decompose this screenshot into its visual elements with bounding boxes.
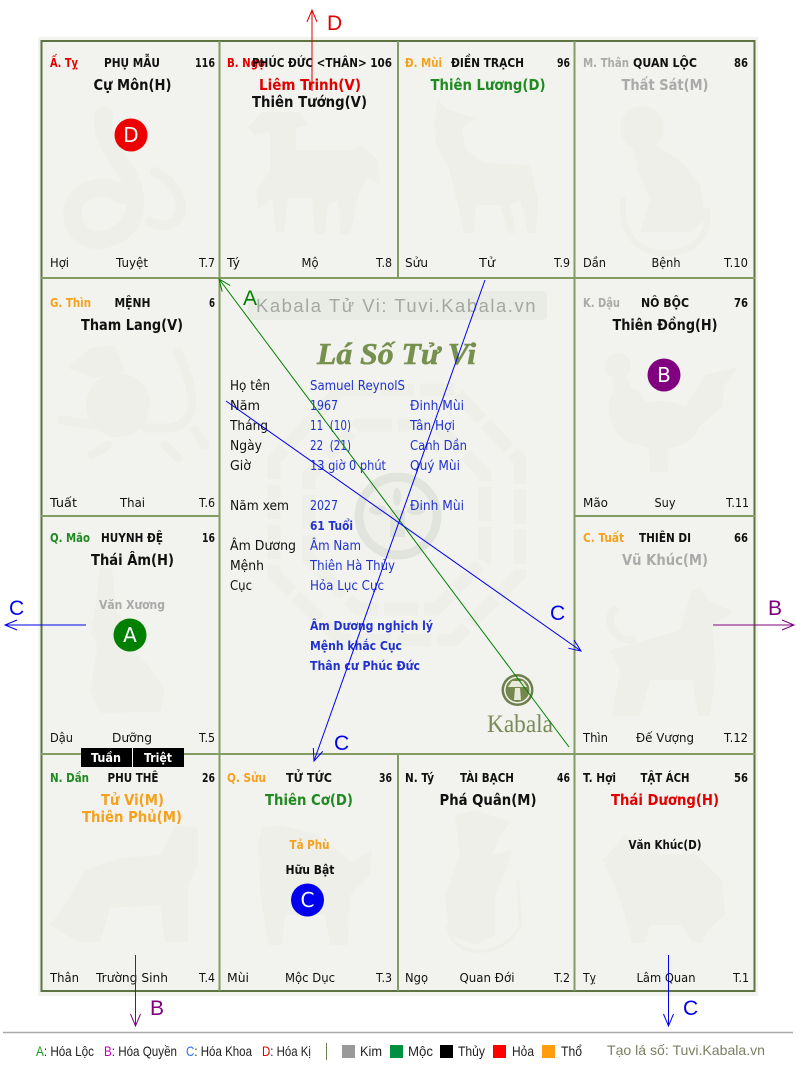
palace: Sửu Tử Tức: Hữu Bật: [286, 862, 335, 877]
arrow: D up: [312, 10, 342, 91]
palace: Mão Huynh Đệ: Q. Mão: [50, 530, 90, 545]
palace: Dậu Nô Bộc: Mão: [583, 495, 608, 510]
palace: Ngọ Phúc Đức: T.8: [375, 255, 392, 270]
palace: Thân Quan Lộc: 86: [734, 55, 748, 70]
arrow: A Hóa Lộc: [219, 279, 569, 747]
badge C: C: [301, 888, 314, 912]
info table: Ngày: [230, 439, 262, 454]
palace: Dần Phu Thê: Tử Vi(M): [101, 791, 164, 809]
badge A: A: [123, 623, 137, 647]
palace: Tý Tài Bạch: TÀI BẠCH: [460, 770, 514, 785]
badge B: B: [657, 363, 671, 387]
palace: Thìn Mệnh: G. Thìn: [50, 295, 91, 310]
palace: Mùi Điền Trạch: 96: [557, 55, 570, 70]
palace: Tý Tài Bạch: 46: [557, 770, 570, 785]
info table: Năm xem: [230, 499, 289, 514]
legend: Hỏa: [512, 1043, 534, 1059]
palace: Mùi Điền Trạch: Sửu: [405, 255, 428, 270]
palace: Ngọ Phúc Đức: Tý: [226, 255, 241, 270]
palace: Dần Phu Thê: 26: [202, 770, 215, 785]
title: Lá Số Tử Vi: [316, 336, 476, 371]
arrow: C to Tuất: [226, 401, 581, 651]
palace: Tuất Thiên Di: 66: [734, 530, 748, 545]
arrow: B down: [136, 955, 164, 1026]
palace: Tuất Thiên Di: T.12: [723, 730, 748, 745]
palace: Hợi Tật Ách: Văn Khúc(D): [628, 837, 702, 852]
palace: Mùi Điền Trạch: Đ. Mùi: [405, 55, 442, 70]
palace: Tý Tài Bạch: T.2: [553, 970, 570, 985]
palace: Dậu Nô Bộc: Thiên Đồng(H): [612, 315, 718, 334]
badge B: [648, 358, 680, 392]
arrow: A Hóa Lộc: A: [243, 287, 257, 310]
legend: Thổ: [561, 1043, 582, 1059]
palace: Mùi Điền Trạch: ĐIỀN TRẠCH: [451, 53, 524, 70]
info table: Canh Dần: [410, 439, 467, 454]
palace: Tỵ Phụ Mẫu: Ấ. Tỵ: [50, 53, 78, 70]
palace: Dần Phu Thê: Trường Sinh: [95, 970, 168, 985]
palace: Dậu Nô Bộc: [583, 295, 749, 510]
palace: Thìn Mệnh: Tham Lang(V): [81, 316, 183, 334]
info table: Cục: [230, 579, 252, 594]
palace: Sửu Tử Tức: TỬ TỨC: [286, 769, 332, 785]
info table: Âm Dương: [230, 538, 296, 554]
palace: Thân Quan Lộc: Bệnh: [652, 255, 680, 270]
badge: Tuần Triệt: Tuần: [91, 750, 121, 765]
info table: Âm Nam: [310, 538, 361, 554]
palace: Tỵ Phụ Mẫu: PHỤ MẪU: [104, 54, 160, 70]
palace: Sửu Tử Tức: Mộc Dục: [285, 970, 335, 985]
palace: Ngọ Phúc Đức: PHÚC ĐỨC <THÂN> 106: [252, 55, 392, 70]
arrow: C to Sửu: [314, 280, 485, 761]
palace: Hợi Tật Ách: 56: [734, 770, 748, 785]
info table: 11 (10): [310, 419, 351, 434]
palace: Tỵ Phụ Mẫu: 116: [195, 55, 215, 70]
palace: Ngọ Phúc Đức: [226, 55, 392, 270]
palace: Thân Quan Lộc: Dần: [583, 255, 606, 270]
site banner: Kabala Tử Vi: Tuvi.Kabala.vn: [256, 296, 537, 316]
info table: Tân Hợi: [409, 419, 455, 434]
palace: Dần Phu Thê: Thiên Phủ(M): [82, 808, 182, 826]
palace: Tỵ Phụ Mẫu: Cự Môn(H): [94, 76, 172, 94]
palace: Thìn Mệnh: Tuất: [49, 495, 77, 510]
site banner: [248, 291, 547, 320]
badge D: D: [123, 123, 139, 147]
badge A: [114, 618, 146, 652]
legend: Kim: [360, 1043, 382, 1059]
legend: [3, 1032, 793, 1060]
legend: Tạo lá số: Tuvi.Kabala.vn: [607, 1042, 765, 1058]
info table: 61 Tuổi: [310, 518, 353, 533]
palace: Thân Quan Lộc: Thất Sát(M): [622, 76, 708, 94]
palace: Tỵ Phụ Mẫu: Hợi: [50, 255, 69, 270]
palace: Thìn Mệnh: MỆNH: [114, 295, 150, 310]
info table: Mệnh khắc Cục: [310, 638, 402, 653]
palace: Mùi Điền Trạch: T.9: [553, 255, 570, 270]
palace: Thìn Mệnh: [49, 295, 215, 510]
palace: Dậu Nô Bộc: Suy: [654, 495, 676, 510]
palace: Dậu Nô Bộc: K. Dậu: [583, 295, 620, 310]
info table: Năm: [230, 399, 260, 414]
palace: Dần Phu Thê: N. Dần: [50, 770, 89, 785]
palace: Hợi Tật Ách: Thái Dương(H): [611, 791, 719, 809]
palace: Dậu Nô Bộc: NÔ BỘC: [641, 295, 689, 310]
palace: Sửu Tử Tức: Thiên Cơ(D): [265, 791, 353, 809]
palace: Mão Huynh Đệ: Văn Xương: [99, 597, 165, 612]
palace: Thân Quan Lộc: [583, 55, 748, 270]
arrow: B right: B: [768, 597, 782, 620]
badge D: [114, 118, 148, 152]
palace: Mão Huynh Đệ: T.5: [198, 730, 215, 745]
info table: Họ tên: [230, 379, 270, 394]
palace: Mão Huynh Đệ: Dưỡng: [112, 730, 152, 745]
palace: Hợi Tật Ách: T. Hợi: [583, 770, 616, 785]
info table: [229, 379, 467, 673]
info table: Mệnh: [230, 559, 264, 574]
palace: Ngọ Phúc Đức: Mộ: [302, 255, 318, 270]
watermark: bagua and tree seal: [274, 390, 520, 640]
arrow: B down: B: [150, 997, 164, 1020]
info table: 13 giờ 0 phút: [310, 459, 386, 474]
palace: Ngọ Phúc Đức: Thiên Tướng(V): [252, 93, 367, 111]
info table: Đinh Mùi: [410, 499, 464, 514]
palace: Mão Huynh Đệ: 16: [202, 530, 215, 545]
palace: Dậu Nô Bộc: 76: [734, 295, 748, 310]
legend: Thủy: [458, 1043, 485, 1059]
info table: 2027: [310, 499, 338, 514]
palace: Sửu Tử Tức: Tả Phù: [290, 837, 330, 852]
palace: Ngọ Phúc Đức: Liêm Trinh(V): [259, 76, 361, 94]
logo: Kabala: [487, 674, 553, 738]
palace: Dần Phu Thê: [49, 770, 215, 985]
palace: Tuất Thiên Di: Đế Vượng: [636, 730, 694, 745]
logo: Kabala: Kabala: [487, 711, 553, 738]
info table: Đinh Mùi: [410, 399, 464, 414]
info table: Hỏa Lục Cục: [310, 579, 384, 594]
legend: C: Hóa Khoa: [186, 1043, 252, 1059]
palace: Tý Tài Bạch: [405, 770, 570, 985]
palace: Mão Huynh Đệ: [50, 530, 215, 745]
palace: Sửu Tử Tức: [227, 769, 392, 985]
info table: Giờ: [230, 459, 251, 474]
palace: Hợi Tật Ách: Lâm Quan: [636, 970, 696, 985]
arrow: C down: C: [683, 997, 698, 1020]
info table: Thân cư Phúc Đức: [310, 658, 420, 673]
palace: Mão Huynh Đệ: Dậu: [50, 730, 73, 745]
arrow: D up: D: [327, 12, 342, 35]
arrow: C left: [5, 597, 86, 625]
palace: Dậu Nô Bộc: T.11: [725, 495, 749, 510]
badge: Tuần Triệt: Triệt: [144, 750, 172, 765]
badge C: [291, 884, 324, 916]
palace: Mùi Điền Trạch: Tử: [478, 255, 496, 270]
arrow: C to Tuất: C: [550, 602, 565, 625]
palace: Dần Phu Thê: Thân: [49, 970, 79, 985]
palace: Dần Phu Thê: PHU THÊ: [108, 770, 158, 785]
palace: Tý Tài Bạch: Ngọ: [405, 970, 428, 985]
palace: Thìn Mệnh: Thai: [119, 495, 145, 510]
arrow: C left: C: [9, 597, 24, 620]
badge: Tuần Triệt: [81, 748, 184, 767]
info table: 22 (21): [310, 439, 351, 454]
info table: 1967: [310, 399, 338, 414]
palace: Tỵ Phụ Mẫu: [50, 53, 215, 270]
legend: A: Hóa Lộc: [36, 1043, 94, 1059]
palace: Tuất Thiên Di: Vũ Khúc(M): [622, 551, 708, 569]
palace: Hợi Tật Ách: [582, 770, 749, 985]
arrow: C down: [668, 955, 698, 1026]
palace: Thìn Mệnh: 6: [209, 295, 215, 310]
palace: Hợi Tật Ách: Tỵ: [582, 970, 597, 985]
legend: Mộc: [408, 1043, 433, 1059]
palace: Sửu Tử Tức: Mùi: [227, 970, 249, 985]
palace: Sửu Tử Tức: T.3: [375, 970, 392, 985]
palace: Hợi Tật Ách: T.1: [732, 970, 749, 985]
palace: Thìn Mệnh: T.6: [198, 495, 215, 510]
palace: Tuất Thiên Di: Thìn: [582, 730, 608, 745]
palace: Tý Tài Bạch: N. Tý: [405, 770, 434, 785]
palace: Mùi Điền Trạch: Thiên Lương(D): [430, 76, 546, 94]
palace: Tý Tài Bạch: Phá Quân(M): [440, 791, 536, 809]
palace: Mão Huynh Đệ: HUYNH ĐỆ: [101, 530, 163, 545]
legend: D: Hóa Kị: [262, 1043, 311, 1059]
panel grid: twelve palaces: [41, 41, 755, 991]
info table: Tháng: [229, 419, 268, 434]
info table: Samuel ReynolS: [310, 379, 405, 394]
palace: Mão Huynh Đệ: Thái Âm(H): [91, 550, 174, 569]
palace: Tuất Thiên Di: THIÊN DI: [639, 530, 691, 545]
palace: Tuất Thiên Di: [582, 530, 748, 745]
arrow: C to Sửu: C: [334, 732, 349, 755]
palace: Dần Phu Thê: T.4: [198, 970, 215, 985]
palace: Tý Tài Bạch: Quan Đới: [460, 970, 514, 985]
palace: Ngọ Phúc Đức: B. Ngọ: [227, 55, 265, 70]
palace: Thân Quan Lộc: T.10: [723, 255, 748, 270]
info table: Âm Dương nghịch lý: [310, 618, 433, 633]
palace: Sửu Tử Tức: 36: [379, 770, 392, 785]
palace: Hợi Tật Ách: TẬT ÁCH: [640, 770, 690, 785]
palace: Thân Quan Lộc: M. Thân: [583, 55, 629, 70]
palace: Tuất Thiên Di: C. Tuất: [583, 530, 624, 545]
palace: Sửu Tử Tức: Q. Sửu: [227, 770, 266, 785]
arrow: B right: [713, 597, 794, 625]
info table: Thiên Hà Thủy: [309, 559, 395, 574]
info table: Quý Mùi: [410, 459, 460, 474]
palace: Tỵ Phụ Mẫu: Tuyệt: [115, 255, 148, 270]
palace: Mùi Điền Trạch: [405, 53, 570, 270]
legend: B: Hóa Quyền: [104, 1043, 177, 1059]
palace: Tỵ Phụ Mẫu: T.7: [198, 255, 215, 270]
watermark: zodiac animals: [50, 100, 738, 951]
palace: Thân Quan Lộc: QUAN LỘC: [633, 55, 697, 70]
